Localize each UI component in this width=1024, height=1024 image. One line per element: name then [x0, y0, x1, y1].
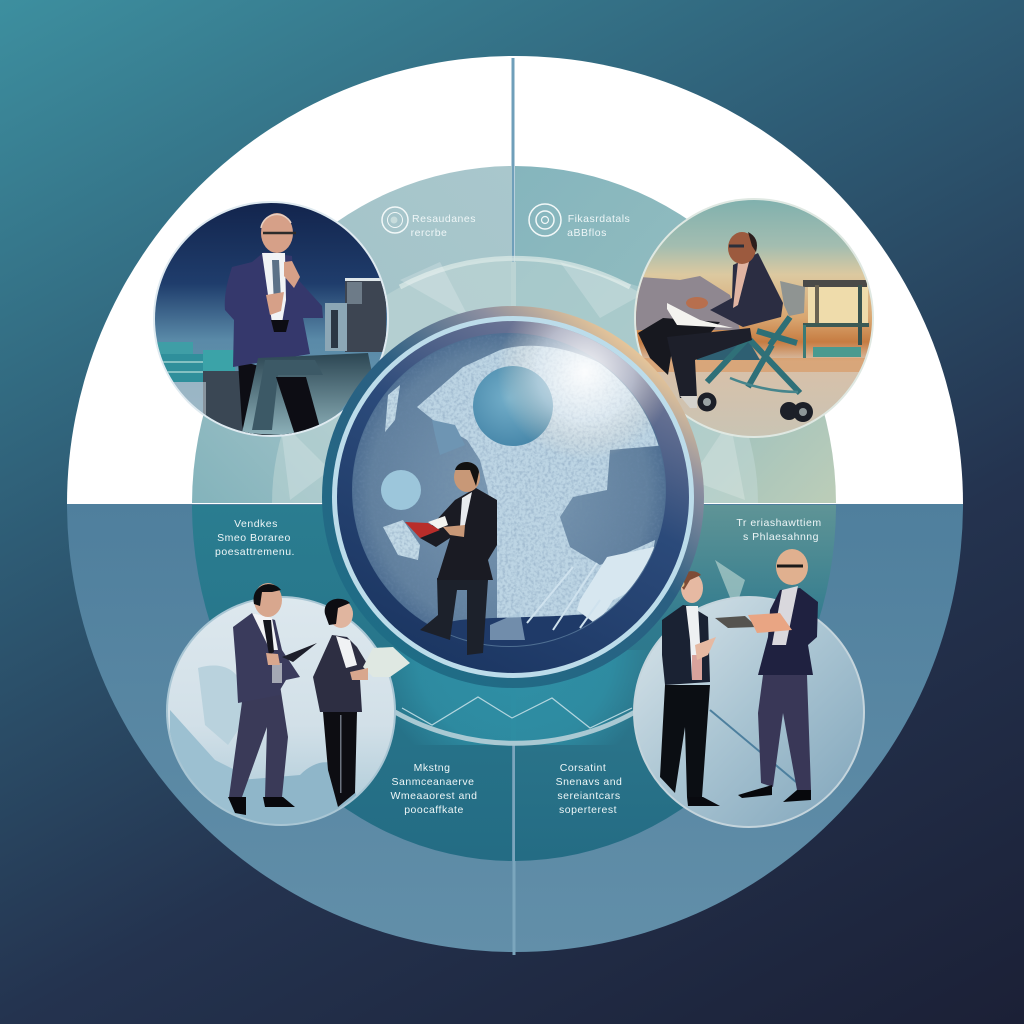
text: top right [529, 204, 630, 239]
photo: top right seated man [630, 198, 880, 438]
text: bottom right: Corsatint [560, 762, 606, 774]
desk monitor [242, 353, 372, 437]
text: bottom left: Mkstng [414, 762, 450, 774]
inner ring [192, 166, 836, 861]
text: bottom right: soperterest [559, 804, 617, 816]
person [638, 318, 720, 375]
icon: top left badge [382, 207, 408, 233]
text: bottom left: Wmeaaorest and [391, 790, 477, 802]
leaves [577, 546, 654, 622]
photo: bottom right two colleagues [634, 549, 864, 827]
text: right middle: Tr eriashawttiem [736, 517, 822, 529]
shelter [808, 285, 868, 325]
person: woman with book [313, 599, 410, 807]
person: bald man with book [715, 549, 818, 802]
text: top left: Resaudanes [412, 213, 476, 225]
central globe [322, 284, 704, 688]
photo: bottom left two colleagues [165, 583, 410, 830]
text: bottom right [556, 762, 622, 816]
photo: top left executive [150, 198, 395, 443]
text: top left [382, 207, 476, 239]
person [238, 364, 319, 435]
text: bottom left: Sanmceanaerve [392, 776, 474, 788]
text: left middle [215, 518, 295, 558]
text: left middle: Smeo Borareo [217, 532, 291, 544]
text: top right: Fikasrdatals [568, 213, 630, 225]
icon: top right badge [529, 204, 561, 236]
text: left middle: Vendkes [234, 518, 278, 530]
person: woman in black [660, 571, 720, 806]
buildings [345, 280, 386, 352]
text: bottom left [391, 762, 477, 816]
faceted ring [272, 258, 758, 745]
navy floor [450, 612, 606, 646]
text: bottom left: poocaffkate [404, 804, 464, 816]
outer circle [67, 56, 963, 955]
person: central presenter [405, 462, 497, 655]
text: right middle: s Phlaesahnng [743, 531, 819, 543]
chair [780, 281, 805, 316]
text: bottom right: Snenavs and [556, 776, 622, 788]
text: right middle [736, 517, 822, 543]
glare [502, 322, 662, 452]
pale swirl [417, 346, 668, 630]
text: left middle: poesattremenu. [215, 546, 295, 558]
person: man with tablet [228, 583, 317, 815]
text: bottom right: sereiantcars [557, 790, 621, 802]
text: top right: aBBflos [567, 227, 607, 239]
desk [203, 371, 251, 434]
text: top left: rercrbe [411, 227, 447, 239]
